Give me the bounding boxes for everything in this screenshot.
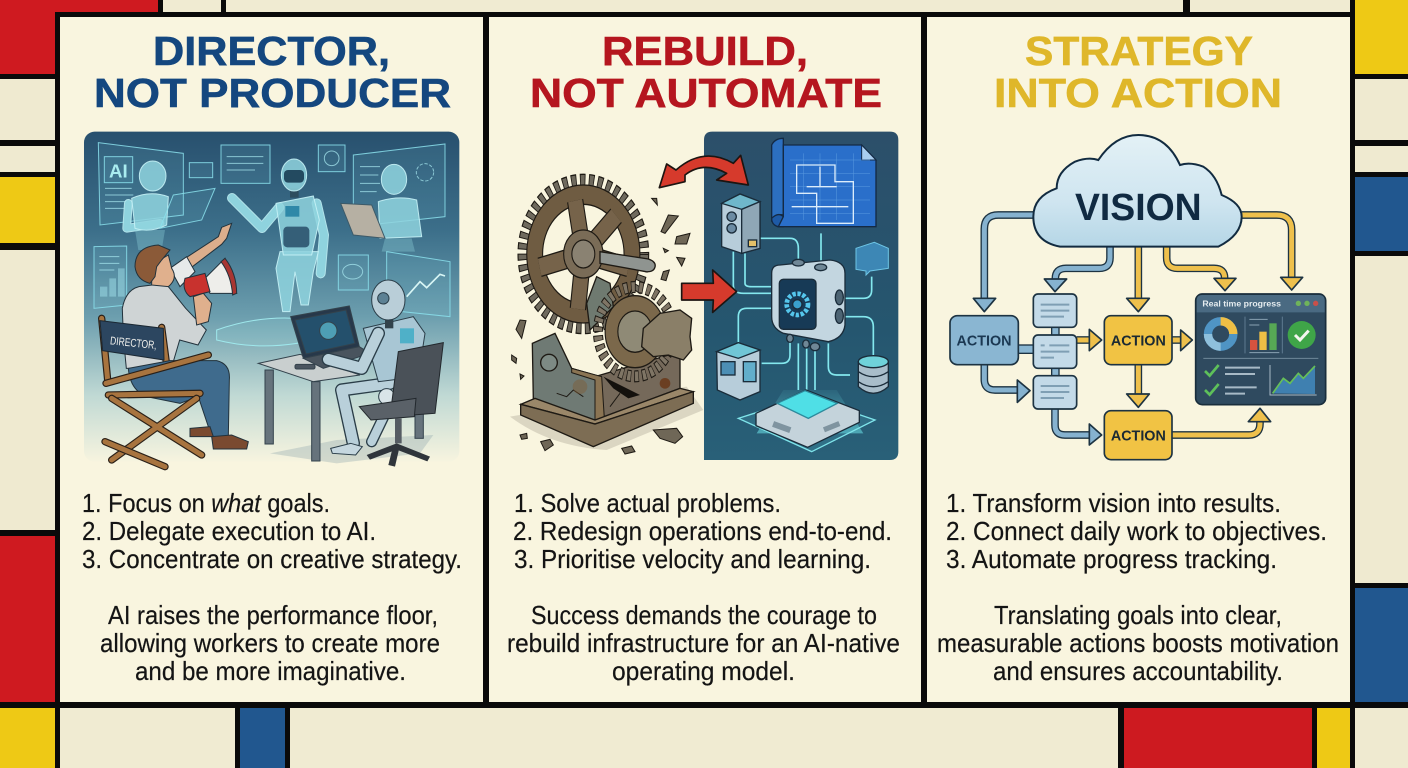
rusty gear machine: [510, 181, 703, 454]
text: list and note: AI raises the performance floor,: [108, 600, 438, 630]
gold arrows: [1077, 215, 1303, 435]
text: list and note: operating model.: [612, 656, 795, 686]
panel: rebuild, not automate: [489, 17, 921, 702]
text: list and note: 2. Delegate execution to AI.: [82, 516, 376, 546]
desk with laptop: [258, 306, 433, 463]
holographic windows: [94, 143, 450, 346]
seated robot and chair: [328, 280, 443, 467]
heading: director: NOT PRODUCER: [94, 70, 451, 116]
heading: director: [94, 28, 451, 116]
gold actions: ACTION: [1111, 428, 1166, 444]
blueprint: [772, 138, 876, 227]
heading: strategy: STRATEGY: [1025, 28, 1253, 74]
broken shaft: [642, 310, 692, 360]
text: list and note: [507, 488, 900, 686]
heading: rebuild: NOT AUTOMATE: [530, 70, 882, 116]
gold actions: [1104, 316, 1172, 460]
text: list and note: 1. Solve actual problems.: [514, 488, 781, 518]
robot centre: [232, 198, 279, 228]
red double arrow: [659, 155, 748, 188]
holographic windows: AI: [109, 160, 128, 181]
glowing AI chip: [738, 390, 875, 452]
connector wires: [733, 233, 873, 390]
robot left: [127, 203, 160, 228]
director chair: DIRECTOR,: [109, 335, 157, 352]
text: list and note: rebuild infrastructure for an AI-native: [507, 628, 900, 658]
text: list and note: measurable actions boosts motivation: [937, 628, 1339, 658]
text: list and note: [937, 488, 1339, 686]
text: list and note: 3. Automate progress tracking.: [946, 544, 1277, 574]
heading: rebuild: [530, 28, 882, 116]
base plate: [521, 388, 693, 424]
illustration: human director instructing AI robots: [84, 132, 459, 467]
support arm: [587, 277, 613, 330]
director chair: [100, 318, 248, 467]
heading: strategy: INTO ACTION: [994, 70, 1282, 116]
base block: [595, 352, 680, 420]
server bottom-left: [717, 343, 760, 400]
text: list and note: 3. Concentrate on creative strategy.: [82, 544, 462, 574]
text: list and note: and be more imaginative.: [135, 656, 406, 686]
panel: director, not producer: [60, 17, 483, 702]
large gear: [523, 181, 643, 327]
small gear: [598, 287, 672, 376]
text: list and note: Success demands the courage to: [531, 600, 877, 630]
text: list and note: and ensures accountability.: [993, 656, 1283, 686]
panel: strategy into action: [927, 17, 1350, 702]
text: list and note: allowing workers to create more: [100, 628, 440, 658]
text: list and note: 3. Prioritise velocity and learning.: [514, 544, 871, 574]
vision cloud: [1033, 135, 1242, 247]
red arrow right: [682, 270, 737, 312]
text: list and note: 2. Connect daily work to objectives.: [946, 516, 1327, 546]
hologram robots: [127, 159, 422, 312]
debris: [512, 198, 690, 454]
blue action with steps: ACTION: [956, 333, 1011, 349]
heading: strategy: [994, 28, 1282, 116]
blue arrows: [973, 215, 1110, 445]
heading: director: DIRECTOR,: [153, 28, 390, 74]
illustration: rusty gears versus AI-native system: [510, 132, 898, 460]
text: list and note: [82, 488, 462, 686]
blue action with steps: [950, 294, 1077, 409]
text: list and note: 1. Focus on what goals.: [82, 488, 330, 518]
flow diagram: vision to action: [950, 135, 1326, 460]
vision cloud: VISION: [1075, 187, 1202, 229]
real time progress dashboard: Real time progress: [1202, 299, 1281, 309]
man with megaphone: [122, 223, 237, 368]
heading: rebuild: REBUILD,: [602, 28, 808, 74]
shaft: [600, 252, 655, 272]
text: list and note: 1. Transform vision into results.: [946, 488, 1281, 518]
text: list and note: 2. Redesign operations end-to-end.: [513, 516, 892, 546]
database: [858, 356, 888, 393]
gold actions: ACTION: [1111, 333, 1166, 349]
real time progress dashboard: [1196, 294, 1326, 405]
central processor box: [772, 259, 845, 351]
robot right: [381, 164, 407, 194]
server top-left: [722, 194, 760, 253]
text: list and note: Translating goals into clear,: [994, 600, 1282, 630]
digital system panel: [704, 132, 898, 460]
chat icon: [856, 242, 888, 275]
